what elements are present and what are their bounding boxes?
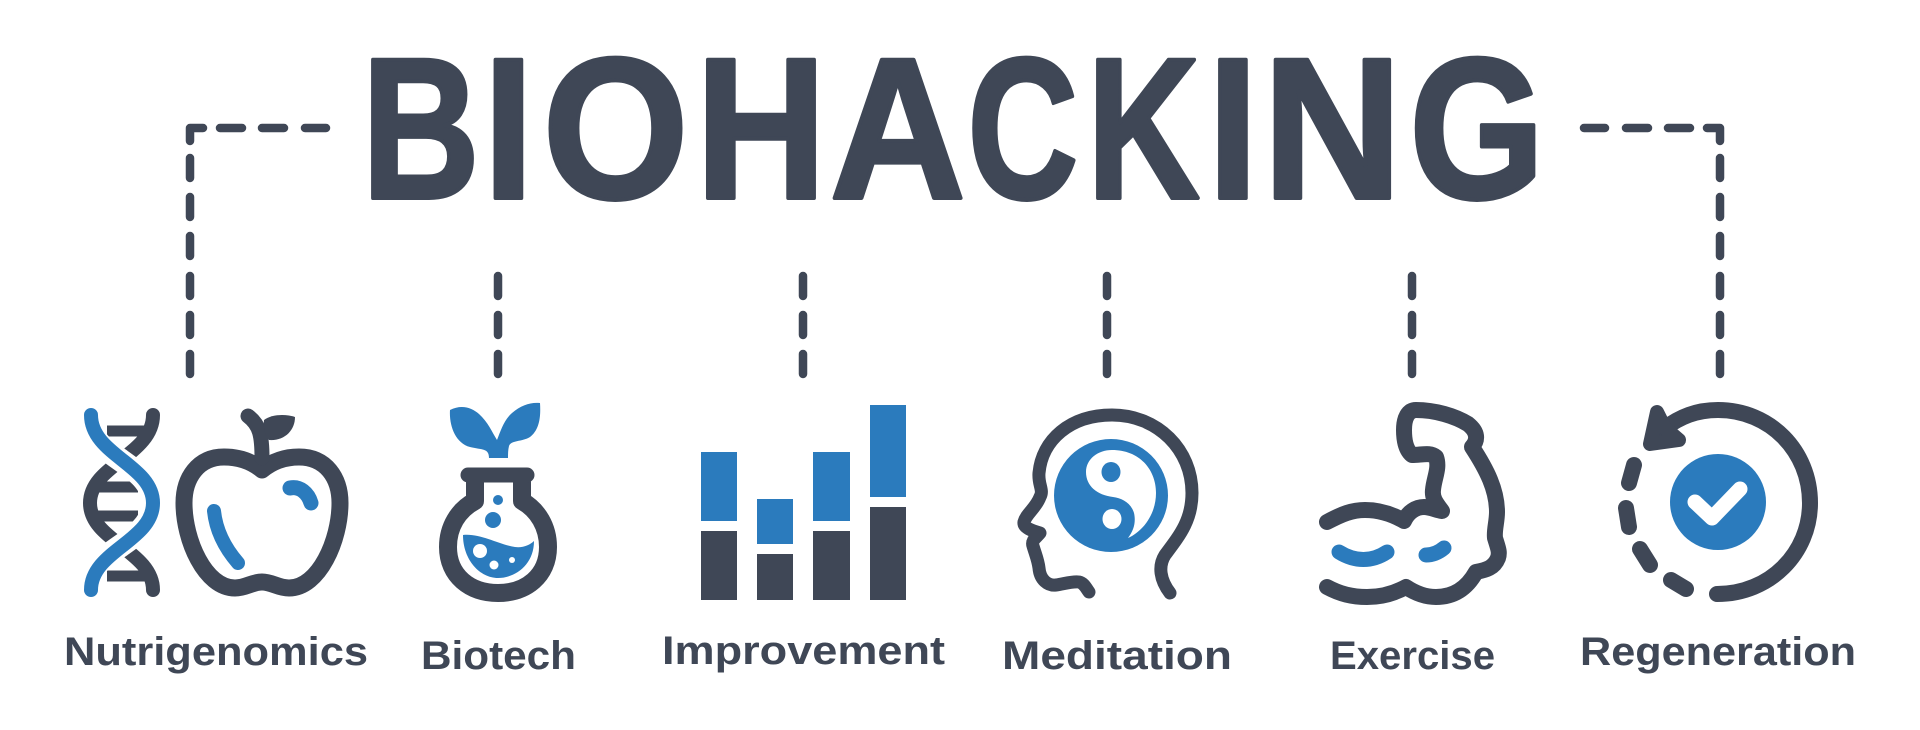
title: K (1087, 16, 1200, 241)
connector: Meditation (1103, 276, 1111, 374)
title: C (968, 16, 1078, 241)
title: H (696, 16, 826, 241)
icon: regeneration cycle with check (1626, 410, 1810, 594)
title: O (543, 16, 689, 241)
connector: left corner to Nutrigenomics (190, 128, 326, 374)
icon: DNA helix (90, 415, 153, 590)
connector: right corner to Regeneration (1584, 128, 1720, 374)
title: I (483, 16, 534, 241)
label: Nutrigenomics: Nutrigenomics (64, 630, 368, 674)
title: I (1208, 16, 1258, 241)
icon: head with yin-yang (1024, 415, 1192, 593)
connector: Biotech (494, 276, 502, 374)
chart icon: improvement bars (701, 405, 906, 600)
label: Meditation: Meditation (1002, 634, 1232, 678)
icon: apple (184, 415, 340, 588)
title: N (1263, 16, 1402, 241)
connector: Exercise (1408, 276, 1416, 374)
icon: flask with sprout (448, 403, 548, 593)
title: B (362, 16, 480, 241)
icon: flexed arm (1327, 410, 1499, 597)
connector: Improvement (799, 276, 807, 374)
label: Biotech: Biotech (421, 634, 576, 678)
label: Regeneration: Regeneration (1580, 630, 1856, 674)
title: A (830, 16, 966, 241)
title: G (1409, 16, 1544, 241)
label: Exercise: Exercise (1330, 634, 1495, 678)
label: Improvement: Improvement (662, 629, 945, 673)
